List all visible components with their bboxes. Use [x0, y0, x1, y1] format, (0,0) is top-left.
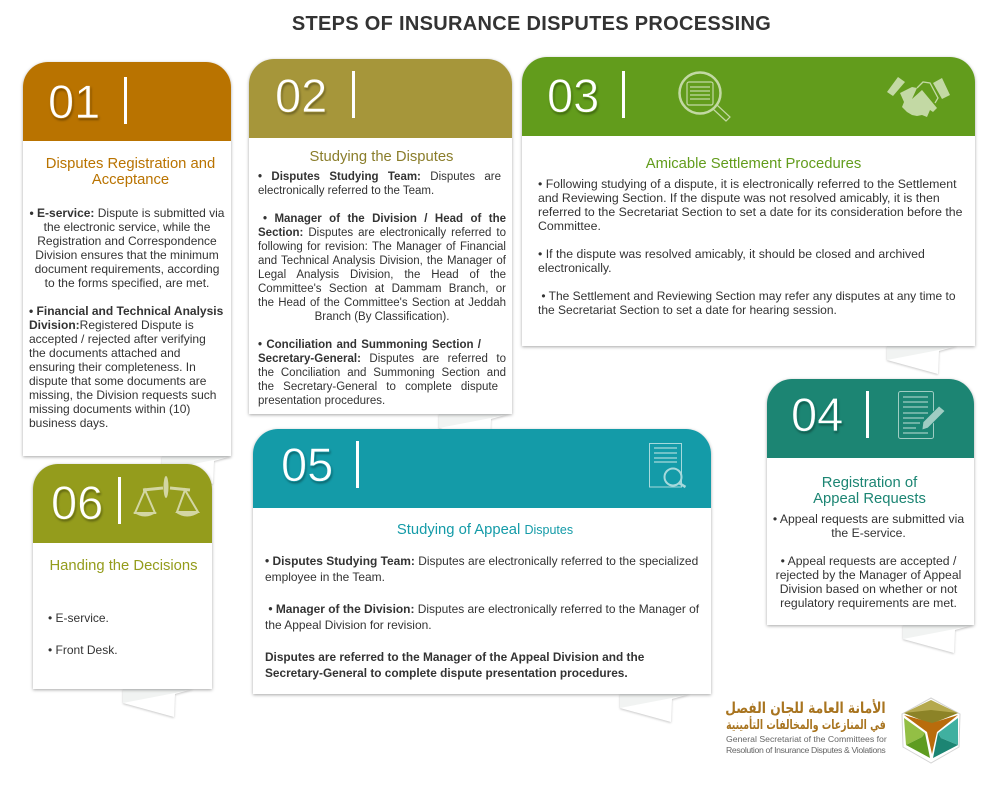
- text: disputes studying team: [258, 171, 501, 197]
- icon: magnifier over document: [678, 71, 731, 122]
- text: e-service: to the forms specified, are met.: [45, 276, 209, 290]
- heading: disputes registration: Disputes Registration and: [46, 156, 215, 172]
- logo cube: [902, 698, 960, 764]
- text: disputes studying team: electronically referred to the Team.: [258, 185, 434, 197]
- text: manager of the division: and Technical Analysis Division, the Manager of: [258, 255, 506, 267]
- text: manager of the division: Legal Analysis Division, the Head of the: [258, 269, 506, 281]
- text: manager of the division: the Head of the Committee's Section at Jeddah: [258, 297, 506, 309]
- text: appeal requests accepted: • Appeal requests are accepted /: [781, 554, 956, 568]
- text: following studying: Committee.: [538, 219, 601, 233]
- text: financial and technical analysis: Division:Registered Dispute is: [29, 318, 194, 332]
- text: e-service: document requirements, according: [35, 262, 219, 276]
- text: manager of the division: • Manager of the Division: Disputes are electronically referred to the Manager of: [268, 602, 699, 616]
- icon: document search: [649, 443, 686, 488]
- text: financial and technical analysis: • Financial and Technical Analysis: [29, 304, 223, 318]
- text: following studying: • Following studying of a dispute, it is electronically referred to the Settlement: [538, 177, 957, 191]
- heading: disputes registration: Acceptance: [92, 172, 169, 188]
- panel: step 01 disputes registration: [23, 62, 231, 456]
- text: e-service: • E-service.: [48, 611, 109, 625]
- text: following studying: referred to the Secretariat Section to set a date for its consideration before the: [538, 205, 962, 219]
- heading: studying the disputes: Studying the Disputes: [310, 149, 453, 165]
- text: manager of the division: [265, 602, 700, 632]
- text: appeal requests accepted: [776, 554, 961, 610]
- heading: amicable settlement: Amicable Settlement Procedures: [646, 156, 861, 172]
- arabic organisation name: الأمانة العامة للجان الفصل: [726, 699, 886, 717]
- text: financial and technical analysis: business days.: [29, 416, 108, 430]
- text: settlement and reviewing section: the Secretariat Section to set a date for hearing session.: [538, 303, 837, 317]
- text: financial and technical analysis: accepted / rejected after verifying: [29, 332, 206, 346]
- text: manager of the division: following for revision: The Manager of Financial: [258, 241, 506, 253]
- text: front desk: • Front Desk.: [48, 643, 118, 657]
- heading: registration of appeal requests: [813, 475, 926, 507]
- text: disputes studying team: [265, 554, 698, 584]
- step number 03: 03: [547, 69, 599, 122]
- panel: step 04 registration of appeal requests: [767, 379, 974, 625]
- panel: step 03 amicable settlement: [522, 57, 975, 346]
- text: financial and technical analysis: the documents attached and: [29, 346, 180, 360]
- english organisation name: [726, 734, 887, 755]
- step number 04: 04: [791, 388, 843, 441]
- text: financial and technical analysis: missing, the Division requests such: [29, 388, 216, 402]
- panel: step 05 studying of appeal disputes: [253, 429, 711, 694]
- text: e-service: Registration and Correspondence: [37, 234, 217, 248]
- text: financial and technical analysis: dispute that some documents are: [29, 374, 206, 388]
- text: manager of the division: • Manager of the Division / Head of the: [263, 213, 506, 225]
- text: settlement and reviewing section: • The Settlement and Reviewing Section may refer any disputes at any time to: [541, 289, 956, 303]
- heading: disputes registration: [46, 156, 215, 188]
- icon: scales: [133, 476, 200, 516]
- text: manager of the division: [258, 213, 506, 323]
- step number 01: 01: [48, 75, 100, 128]
- text: following studying: [538, 177, 962, 233]
- text: disputes studying team: employee in the Team.: [265, 570, 385, 584]
- text: conciliation and summoning: Secretary-General: Disputes are referred to: [258, 353, 506, 365]
- text: conciliation and summoning: [258, 339, 506, 407]
- text: financial and technical analysis: [29, 304, 223, 430]
- text: financial and technical analysis: ensuring their completeness. In: [29, 360, 196, 374]
- text: financial and technical analysis: missing documents within (10): [29, 402, 190, 416]
- text: manager of the division: Section: Disputes are electronically referred to: [258, 227, 506, 239]
- heading: studying of appeal disputes: Studying of Appeal Disputes: [397, 522, 573, 538]
- text: disputes studying team: • Disputes Studying Team: Disputes are electronically referred to the specialized: [265, 554, 698, 568]
- text: manager of the division: Branch (By Classification).: [315, 311, 449, 323]
- text: conciliation and summoning: the Secretary-General to complete dispute: [258, 381, 498, 393]
- panel: step 06 handing the decisions: [33, 464, 212, 689]
- english organisation name: Resolution of Insurance Disputes & Violations: [726, 745, 885, 755]
- text: resolved amicably: • If the dispute was resolved amicably, it should be closed and archived: [538, 247, 925, 261]
- title: STEPS OF INSURANCE DISPUTES PROCESSING: [292, 13, 771, 35]
- text: manager of the division: Committee's Section at Dammam Branch, or: [258, 283, 506, 295]
- text: appeal requests submitted: the E-service.: [831, 526, 906, 540]
- text: appeal requests submitted: [773, 512, 964, 540]
- text: conciliation and summoning: presentation procedures.: [258, 395, 385, 407]
- text: following studying: and Reviewing Section. If the dispute was not resolved amicably, it is then: [538, 191, 940, 205]
- text: referred to manager and secretary-general: [265, 650, 644, 680]
- text: e-service: [30, 206, 224, 290]
- step number 02: 02: [275, 69, 327, 122]
- panel: step 02 studying the disputes: [249, 59, 512, 414]
- icon: handshake: [887, 77, 950, 117]
- text: e-service: Division ensures that the minimum: [35, 248, 219, 262]
- english organisation name: General Secretariat of the Committees for: [726, 734, 887, 744]
- text: manager of the division: the Appeal Division for revision.: [265, 618, 432, 632]
- text: appeal requests accepted: Division based on whether or not: [780, 582, 957, 596]
- text: conciliation and summoning: the Conciliation and Summoning Section and: [258, 367, 506, 379]
- icon: document and pen: [898, 391, 944, 439]
- heading: registration of appeal requests: Appeal Requests: [813, 491, 926, 507]
- text: e-service: the electronic service, while the: [44, 220, 210, 234]
- text: appeal requests accepted: regulatory requirements are met.: [780, 596, 957, 610]
- step number 05: 05: [281, 438, 333, 491]
- text: settlement and reviewing section: [538, 289, 956, 317]
- heading: handing the decisions: Handing the Decisions: [49, 558, 198, 574]
- text: resolved amicably: electronically.: [538, 261, 612, 275]
- text: e-service: • E-service: Dispute is submitted via: [30, 206, 224, 220]
- step number 06: 06: [51, 476, 103, 529]
- text: resolved amicably: [538, 247, 925, 275]
- logo text: [726, 699, 887, 755]
- heading: registration of appeal requests: Registration of: [822, 475, 917, 491]
- arabic organisation name: في المنازعات والمخالفات التأمينية: [726, 718, 886, 733]
- text: disputes studying team: • Disputes Studying Team: Disputes are: [258, 171, 501, 183]
- text: referred to manager and secretary-general: Disputes are referred to the Manager of the Appeal Division and the: [265, 650, 644, 664]
- text: appeal requests submitted: • Appeal requests are submitted via: [773, 512, 964, 526]
- text: referred to manager and secretary-general: Secretary-General to complete dispute presentation procedures.: [265, 666, 628, 680]
- text: appeal requests accepted: rejected by the Manager of Appeal: [776, 568, 961, 582]
- arabic organisation name: [726, 699, 886, 733]
- text: conciliation and summoning: • Conciliation and Summoning Section /: [258, 339, 481, 351]
